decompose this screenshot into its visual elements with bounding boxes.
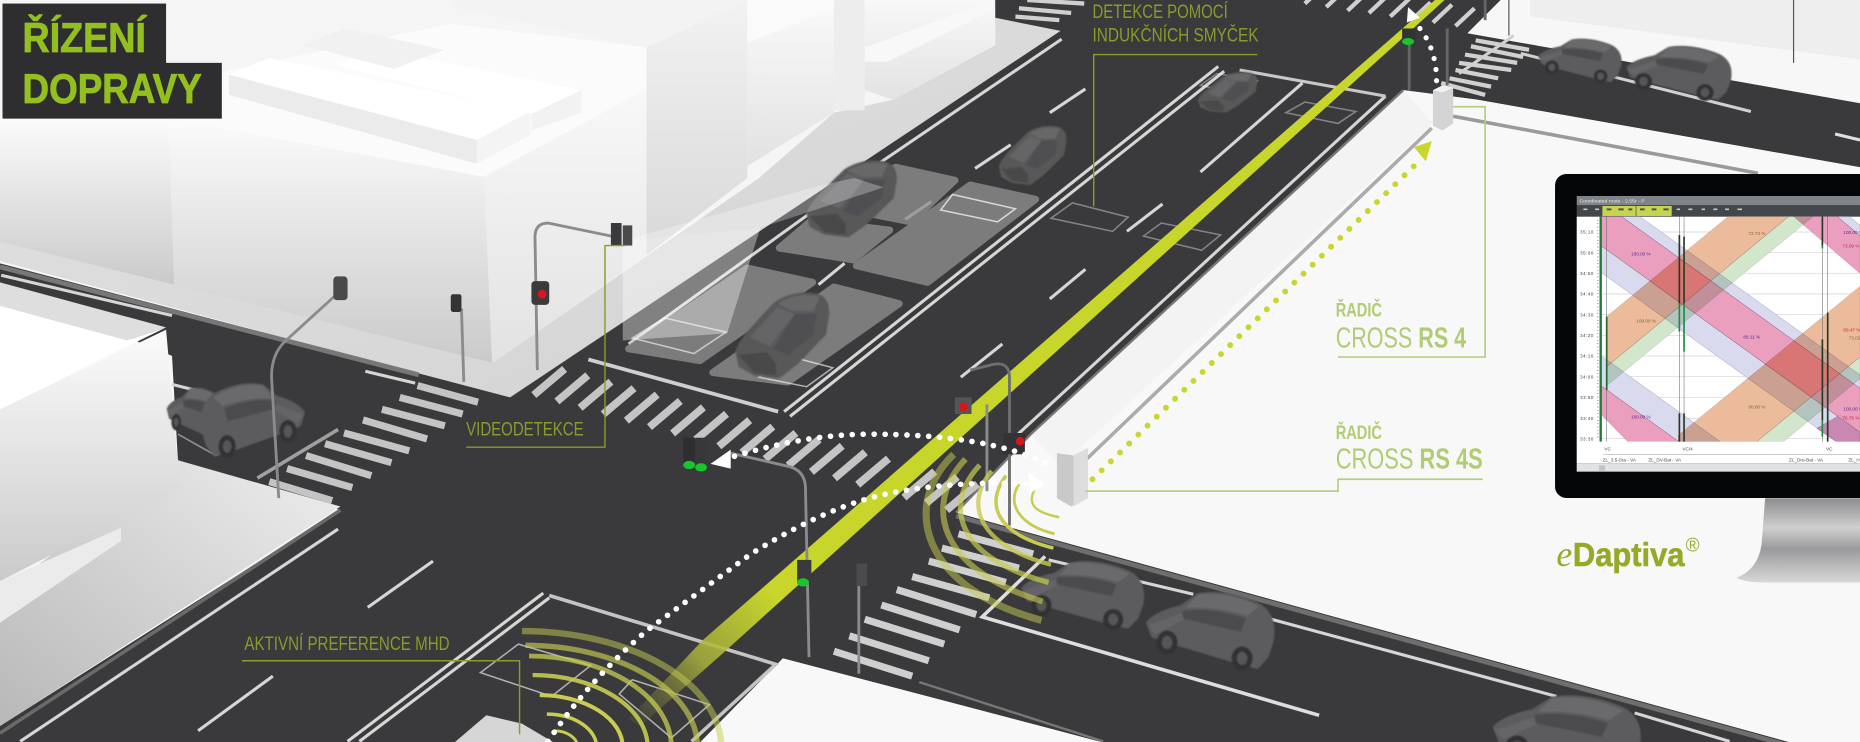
poles: top (1409, 0, 1485, 90)
time axis labels (1580, 230, 1594, 441)
time axis labels: 34:50 (1580, 271, 1594, 276)
panel: south sidewalk block (700, 658, 1103, 742)
pole: west small (461, 308, 464, 382)
band percentages: 100.00 % (1631, 252, 1651, 257)
building two (646, 0, 747, 255)
band percentages (1631, 230, 1860, 421)
signal: east red lower (1004, 433, 1025, 454)
signal: south head (856, 563, 867, 586)
label: induction loop detection: DETEKCE POMOCÍ (1093, 2, 1228, 23)
building three (747, 9, 834, 166)
signal heads (333, 28, 1415, 587)
crosswalk: east (834, 534, 1033, 676)
main building front face (168, 119, 492, 363)
band percentages: 100.00 % (1636, 319, 1656, 324)
label: induction loop detection: INDUKČNÍCH SMYČEK (1093, 25, 1259, 47)
car: parked left (201, 383, 305, 458)
car: top right (1538, 39, 1622, 83)
label: controller CROSS RS 4S: ŘADIČ (1336, 422, 1382, 444)
time axis labels: 35:10 (1580, 230, 1594, 235)
title box (2, 4, 222, 119)
intersection labels: VC/4 (1682, 447, 1693, 452)
controller box: CROSS RS 4S (1057, 446, 1088, 507)
camera detection cone (623, 178, 884, 340)
window title bar: Coordinated route - 2.55r - P (1579, 198, 1645, 203)
label: controller CROSS RS 4 (1336, 300, 1466, 355)
bus (454, 715, 554, 742)
signal: east red upper (955, 397, 972, 414)
logo: eDaptiva: e (1556, 534, 1572, 574)
radar waves: controller detector (926, 454, 1059, 620)
roof volume A (229, 58, 530, 140)
pole with camera arm (535, 223, 617, 370)
time axis labels: 34:10 (1580, 354, 1594, 359)
leader: induction loops (1094, 55, 1257, 206)
signal group bars (1598, 217, 1828, 442)
intersection labels: VC (1826, 447, 1833, 452)
window title bar (1577, 196, 1860, 205)
signal: west (333, 276, 348, 300)
coloured progression bands (1600, 216, 1860, 442)
intersection labels: ZL_Dre-Bat - VA (1789, 458, 1824, 463)
signal: red (531, 281, 549, 305)
pole: east thin (986, 405, 988, 491)
arrow: yellow dotted link between controllers (1093, 141, 1432, 479)
intersection labels (1603, 447, 1860, 463)
label: video detection: VIDEODETEKCE (466, 419, 584, 440)
band percentages: 90.00 % (1748, 405, 1765, 410)
building four (865, 0, 994, 100)
band percentages: 89.11 % (1743, 334, 1760, 339)
leader: bus priority (242, 661, 520, 734)
car: north lane upper (1198, 72, 1257, 113)
left building face (0, 119, 174, 285)
label: active public transport priority: AKTIVNÍ PREFERENCE MHD (244, 634, 450, 655)
signal: west small (451, 294, 461, 312)
time axis labels: 34:00 (1580, 374, 1594, 379)
pole with arm: centre (731, 453, 809, 657)
time axis labels: 34:20 (1580, 333, 1594, 338)
car: parked left rear (167, 387, 225, 441)
car: north lane (999, 126, 1066, 185)
intersection labels: ZL_DV-Bat - VA (1648, 458, 1682, 463)
crosswalk: west (269, 386, 478, 501)
van: in video zone upper (807, 161, 897, 237)
pole: south (858, 569, 860, 674)
title text: DOPRAVY (23, 65, 202, 112)
time axis labels: 33:50 (1580, 395, 1594, 400)
label: controller CROSS RS 4S (1336, 422, 1483, 476)
intersection labels: ZL_3.5-Sra - VA (1603, 458, 1637, 463)
band percentages: 72.73 % (1748, 231, 1765, 236)
main building side face (484, 89, 646, 363)
cars (167, 39, 1732, 742)
time axis labels: 35:00 (1580, 250, 1594, 255)
video detection zones (629, 167, 1036, 382)
radar waves: bus priority detector (522, 631, 721, 742)
car: bottom right (1493, 695, 1641, 742)
panel: sidewalk east with controller strip (956, 90, 1860, 742)
label: induction loop detection (1093, 2, 1259, 47)
window status strip (1577, 463, 1860, 472)
controller box: CROSS RS 4 (1433, 85, 1453, 130)
camera head (611, 223, 632, 246)
band percentages: 73.09 % (1842, 244, 1859, 249)
main building roof (168, 24, 646, 177)
intersection labels: VC (1604, 447, 1611, 452)
car: east leg two (1146, 592, 1275, 670)
panel: white buildings upper left (0, 0, 1060, 399)
leader: controller RS 4S (1085, 479, 1483, 491)
column (834, 0, 865, 110)
yellow bus priority lane (629, 0, 1447, 726)
signal: lane green (797, 560, 811, 587)
traffic lights and poles (272, 0, 1485, 674)
label: controller CROSS RS 4: CROSS RS 4 (1336, 323, 1466, 355)
leader: video detection (466, 246, 625, 447)
sidewalk north-west (0, 18, 1060, 399)
band percentages: 89.47 % (1843, 327, 1860, 332)
toolbar (1577, 205, 1860, 217)
roof volume B (336, 49, 581, 114)
grid lines (1600, 232, 1860, 439)
pole with arm: east (970, 364, 1009, 526)
monitor stand (1737, 498, 1860, 582)
signal: top green (1402, 28, 1415, 45)
leader: controller RS 4 (1338, 107, 1485, 357)
time axis labels: 33:30 (1580, 436, 1594, 441)
band percentages: 76.76 % (1842, 416, 1859, 421)
van: in video zone lower (735, 292, 829, 378)
label: controller CROSS RS 4: ŘADIČ (1336, 300, 1382, 322)
induction loops (480, 74, 1356, 738)
intersection labels: ZL_H (1848, 458, 1860, 463)
label: controller CROSS RS 4S: CROSS RS 4S (1336, 444, 1483, 476)
arrow: white dotted controller to top signal (1407, 7, 1437, 81)
arrow: white dotted controller to signal (711, 434, 1045, 469)
band percentages: 100.00 % (1631, 414, 1651, 419)
logo: eDaptiva: Daptiva (1573, 537, 1685, 574)
monitor with eDaptiva time-space chart (1555, 170, 1860, 498)
time axis labels: 34:40 (1580, 292, 1594, 297)
title text: ŘÍZENÍ (23, 14, 147, 61)
van: top right (1626, 46, 1732, 101)
crosswalks: upper junction (1015, 0, 1529, 95)
crosswalk: north (534, 369, 977, 510)
time axis labels: 34:30 (1580, 312, 1594, 317)
panel: building lower left (0, 267, 419, 733)
logo: eDaptiva: ® (1686, 536, 1700, 557)
car: east leg one (1021, 561, 1144, 630)
chart area (1577, 217, 1860, 463)
signal: centre green (683, 438, 707, 472)
arrow: white dotted bus to controller (548, 472, 1045, 741)
panel: top-right distant building (1509, 0, 1860, 63)
time axis labels: 33:40 (1580, 416, 1594, 421)
pole with arm: west (272, 293, 338, 498)
title text (23, 14, 202, 112)
